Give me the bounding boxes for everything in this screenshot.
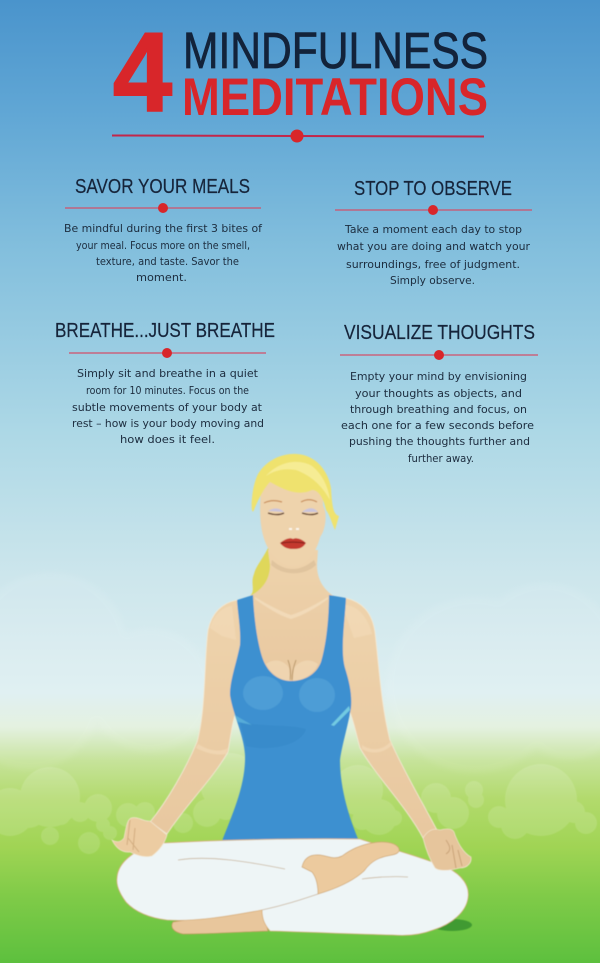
left arm [150, 600, 250, 834]
body text: each one for a few seconds before [341, 420, 534, 432]
body text [64, 223, 262, 284]
panel: visualize thoughts [340, 322, 538, 465]
body text: how does it feel. [120, 434, 215, 446]
heading: SAVOR YOUR MEALS [75, 176, 250, 198]
body text: surroundings, free of judgment. [346, 259, 520, 271]
body text: further away. [408, 453, 474, 465]
title line: Meditations: MEDITATIONS [182, 68, 488, 127]
body text: your meal. Focus more on the smell, [76, 240, 250, 252]
trouser creases [178, 858, 408, 910]
hair highlight [266, 462, 330, 500]
body text: subtle movements of your body at [72, 402, 262, 414]
body text: moment. [136, 272, 187, 284]
face [260, 475, 323, 566]
right hand [423, 829, 471, 870]
panel: stop to observe [335, 178, 532, 287]
body text: what you are doing and watch your [337, 241, 531, 253]
body text: pushing the thoughts further and [349, 436, 530, 448]
eyebrows [264, 500, 317, 503]
lips [280, 538, 306, 549]
body text: through breathing and focus, on [350, 404, 527, 416]
body text [72, 368, 264, 446]
body text: rest – how is your body moving and [72, 418, 264, 430]
closed eyes [268, 513, 318, 514]
arm shading [196, 605, 392, 755]
divider [65, 203, 261, 213]
title [113, 10, 488, 135]
left hand [112, 818, 167, 857]
body text: room for 10 minutes. Focus on the [86, 385, 249, 397]
blue tank top [222, 595, 359, 841]
body text [337, 224, 531, 287]
divider [69, 348, 266, 358]
title numeral 4: 4 [113, 10, 172, 135]
eyelids [268, 508, 318, 512]
body text: Simply observe. [390, 275, 475, 287]
collar highlight [255, 597, 328, 619]
body text: your thoughts as objects, and [355, 388, 522, 400]
clouds [0, 572, 600, 773]
body text [341, 371, 534, 465]
heading: BREATHE...JUST BREATHE [55, 320, 275, 342]
body text: Simply sit and breathe in a quiet [77, 368, 258, 380]
heading: STOP TO OBSERVE [354, 178, 512, 200]
right hand fingers [446, 840, 462, 868]
body text: Empty your mind by envisioning [350, 371, 527, 383]
tank top shading [233, 676, 350, 748]
illustration: meditating woman [112, 454, 472, 935]
ear [316, 505, 326, 537]
ground shadow [432, 919, 472, 931]
body text: texture, and taste. Savor the [96, 256, 239, 268]
nose [289, 528, 299, 530]
chin shadow [271, 560, 316, 573]
lower foot [172, 908, 268, 934]
panel: breathe just breathe [55, 320, 275, 446]
ponytail [250, 548, 272, 596]
panel: savor your meals [64, 176, 262, 284]
right arm [335, 598, 438, 838]
upper foot [302, 842, 399, 894]
title divider [112, 130, 484, 142]
divider [335, 205, 532, 215]
hair [252, 454, 339, 530]
bokeh circles [0, 753, 597, 854]
body text: Take a moment each day to stop [344, 224, 522, 236]
cleavage lines [288, 660, 296, 680]
white trousers [117, 839, 468, 935]
divider [340, 350, 538, 360]
neck and chest [240, 550, 345, 682]
heading: VISUALIZE THOUGHTS [344, 322, 535, 344]
body text: Be mindful during the first 3 bites of [64, 223, 262, 235]
left hand fingers [127, 820, 139, 852]
title line: Mindfulness: MINDFULNESS [183, 22, 488, 79]
